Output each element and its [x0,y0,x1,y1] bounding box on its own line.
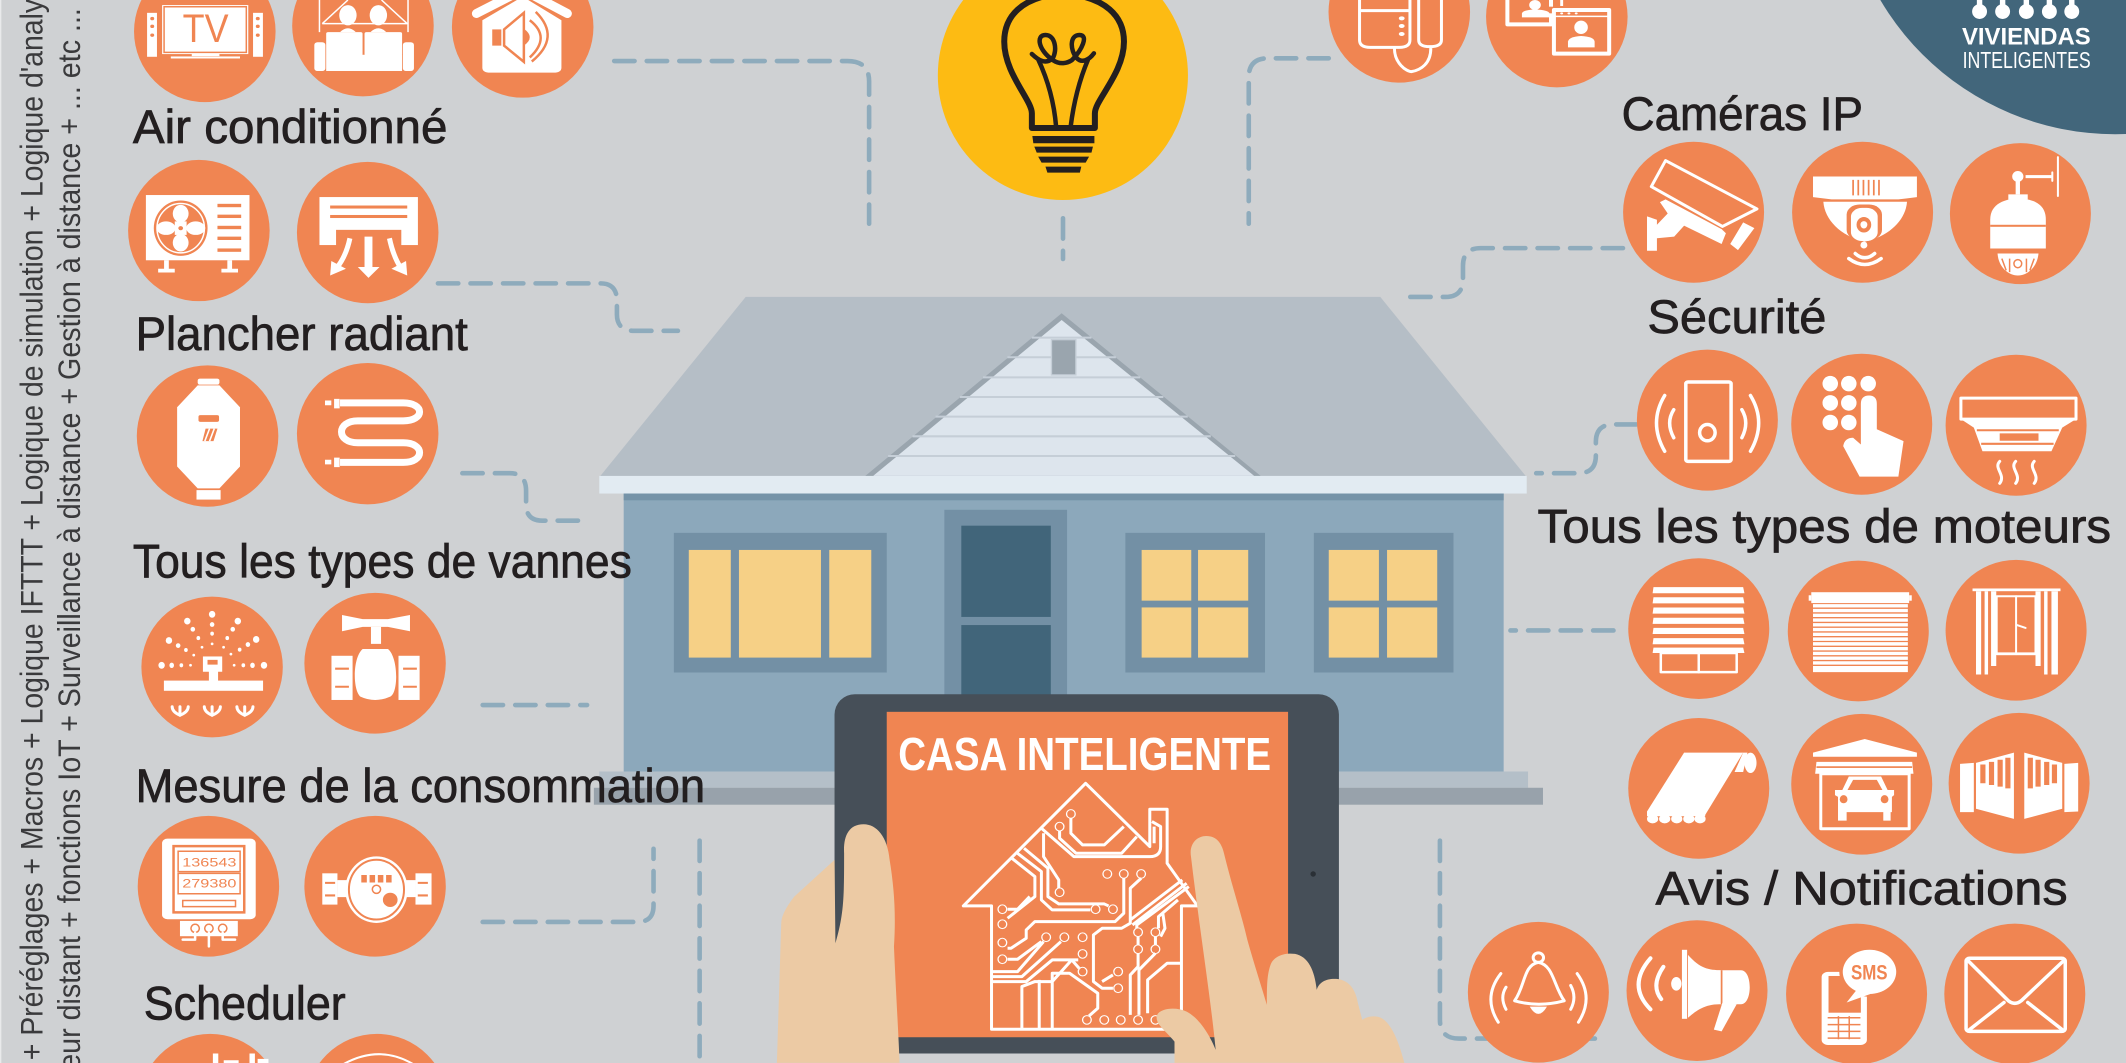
icon: electricity meter: 136543 [182,856,236,870]
panel: upper left icons [128,0,593,507]
dashed connectors [438,58,1637,1063]
door [944,510,1067,700]
tablet screen [887,712,1288,1037]
circuit house [963,783,1197,1029]
icon: indoor air conditioner [297,162,438,303]
icon: megaphone [1627,920,1768,1061]
heading: floor heating: Plancher radiant [136,308,468,361]
icon: intercom [1329,0,1470,83]
icon: garage door [1791,714,1932,855]
tablet with hands [777,694,1404,1063]
logo dots [1972,0,2079,19]
icon: smoke detector [1946,355,2087,496]
logo name: VIVIENDAS [1962,24,2091,51]
house illustration [594,297,1543,805]
front steps [594,771,1543,805]
icon: home cinema [292,0,434,96]
icon: motion sensor [1637,350,1778,491]
icon: keypad [1791,354,1932,495]
wall [624,494,1504,773]
gable [864,313,1262,477]
window centre right [1125,533,1265,673]
heading: valves: Tous les types de vannes [133,536,632,589]
icon: roller shutter [1788,561,1929,701]
heading: notifications: Avis / Notifications [1656,862,2068,915]
heading: air conditioning: Air conditionné [133,101,447,154]
window far right [1314,533,1453,673]
panel: motors and notifications icons [1468,558,2090,1063]
icon: scheduler timer [139,1034,281,1063]
large window [674,533,887,673]
icon: outdoor air conditioner [128,160,270,301]
icon: heating coil [297,363,438,504]
roof [599,297,1527,477]
icon: water heater [137,365,278,507]
tablet title: CASA INTELIGENTE [898,728,1271,780]
icon: dome camera [1792,142,1933,283]
logo subtitle: INTELIGENTES [1963,47,2091,73]
icon: scheduler clock [306,1034,448,1063]
icon: bell [1468,922,1609,1063]
icon: gate [1949,713,2090,854]
panel: lower left icons [138,593,446,957]
light bulb [938,0,1628,200]
icon: speed dome camera [1950,143,2091,284]
icon: sms phone: SMS [1851,961,1888,985]
icon: water meter [304,816,446,957]
heading: consumption: Mesure de la consommation [136,760,705,813]
icon: envelope [1944,924,2085,1063]
eave [599,476,1527,494]
camera dot [1310,871,1316,877]
icon: sprinkler [141,597,283,737]
hands [777,824,1404,1063]
icon: surveillance camera [1623,142,1764,283]
icon: venetian blind [1628,558,1769,699]
icon: valve [304,593,446,734]
icon: home audio [452,0,593,98]
icon: video call [1486,0,1628,87]
heading: security: Sécurité [1647,291,1826,344]
icon: awning [1628,718,1769,859]
icon: motorised curtains [1946,560,2087,701]
icon: television [134,0,276,102]
tablet body [835,694,1339,1054]
panel: scheduler icons [139,1034,448,1063]
heading: motors: Tous les types de moteurs [1538,500,2111,553]
vertical text: features list [15,0,87,1063]
icon: electricity meter: 279380 [182,878,236,891]
heading: ip cameras: Caméras IP [1622,88,1863,141]
icon: television: TV [183,7,229,51]
heading: scheduler: Scheduler [144,978,346,1031]
icon: sms phone [1786,924,1927,1063]
logo badge [1843,0,2126,134]
icon: electricity meter [138,816,279,957]
panel: cameras and security icons [1623,142,2091,496]
